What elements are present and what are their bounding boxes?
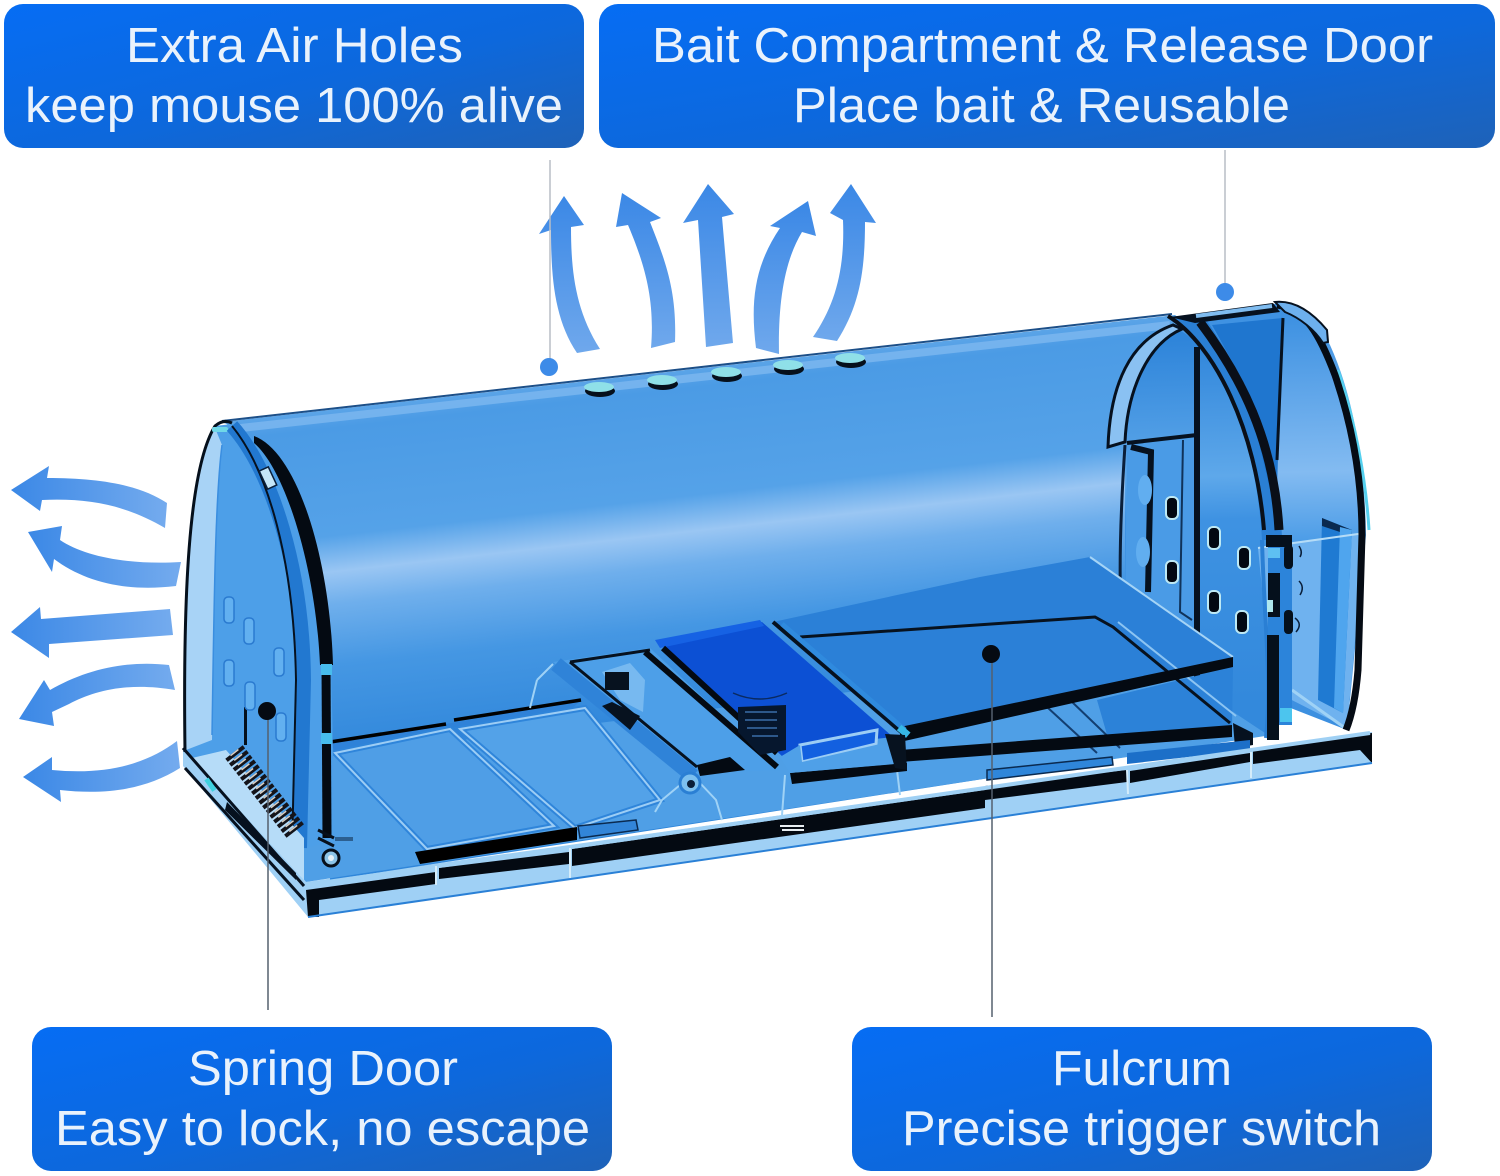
trap: rear latch hardware <box>1266 535 1302 740</box>
callout: extra air holes <box>4 4 584 148</box>
trap: floor <box>200 640 1272 882</box>
trap: spring bolt <box>318 830 353 866</box>
callout: spring door: Easy to lock, no escape <box>55 1102 590 1156</box>
trap: main tube <box>222 315 1268 880</box>
callout: fulcrum <box>852 1027 1432 1171</box>
deep blue panel <box>660 622 893 757</box>
right rod <box>773 622 907 737</box>
mouse trap <box>183 302 1372 917</box>
internal spring <box>738 705 786 755</box>
trap: left end wall <box>185 421 335 850</box>
callout: extra air holes: Extra Air Holes <box>126 19 463 73</box>
trap: door spring <box>192 750 304 880</box>
callout: spring door <box>32 1027 612 1171</box>
trap: outer rear arch and handle <box>1170 302 1369 730</box>
callout: bait compartment and release door <box>599 4 1495 148</box>
callout: fulcrum: Precise trigger switch <box>902 1102 1381 1156</box>
trap: tube top rim <box>232 325 1170 429</box>
leader line: spring door <box>258 702 276 1010</box>
trap: rear compartment <box>1168 304 1366 730</box>
callout: extra air holes: keep mouse 100% alive <box>25 79 563 133</box>
callout: bait compartment and release door: Place bait & Reusable <box>793 79 1290 133</box>
mechanism <box>602 663 645 730</box>
trap: tube inner arch rim <box>1108 325 1182 447</box>
leader line: bait compartment <box>1216 150 1234 301</box>
rear glass box <box>1258 533 1365 728</box>
callout: bait compartment and release door: Bait Compartment & Release Door <box>652 19 1433 73</box>
leader line: air holes <box>540 160 558 376</box>
trap: inner door panel <box>1120 347 1197 690</box>
trap: air holes <box>584 353 866 397</box>
leader line: fulcrum <box>982 645 1000 1017</box>
trap: base front edge <box>183 733 1372 917</box>
callout: spring door: Spring Door <box>188 1042 458 1096</box>
tray <box>800 730 877 762</box>
black bars <box>900 657 1233 742</box>
trap: right end wall <box>1125 328 1268 735</box>
airflow arrows: top <box>539 184 876 354</box>
trap: right base details <box>1047 667 1253 753</box>
callout: fulcrum: Fulcrum <box>1052 1042 1232 1096</box>
trap: seesaw lever <box>553 620 911 793</box>
trap: end wall holes <box>1166 497 1250 633</box>
end wall vent slots <box>224 597 286 741</box>
trap: base slab <box>183 732 1372 917</box>
trap: floor panels <box>335 664 900 864</box>
trap: central arch <box>1168 316 1279 738</box>
airflow arrows: left <box>11 466 181 802</box>
roller end <box>680 773 700 793</box>
trap: hinged trigger plate <box>773 557 1250 780</box>
trap: left front rim <box>232 426 333 850</box>
